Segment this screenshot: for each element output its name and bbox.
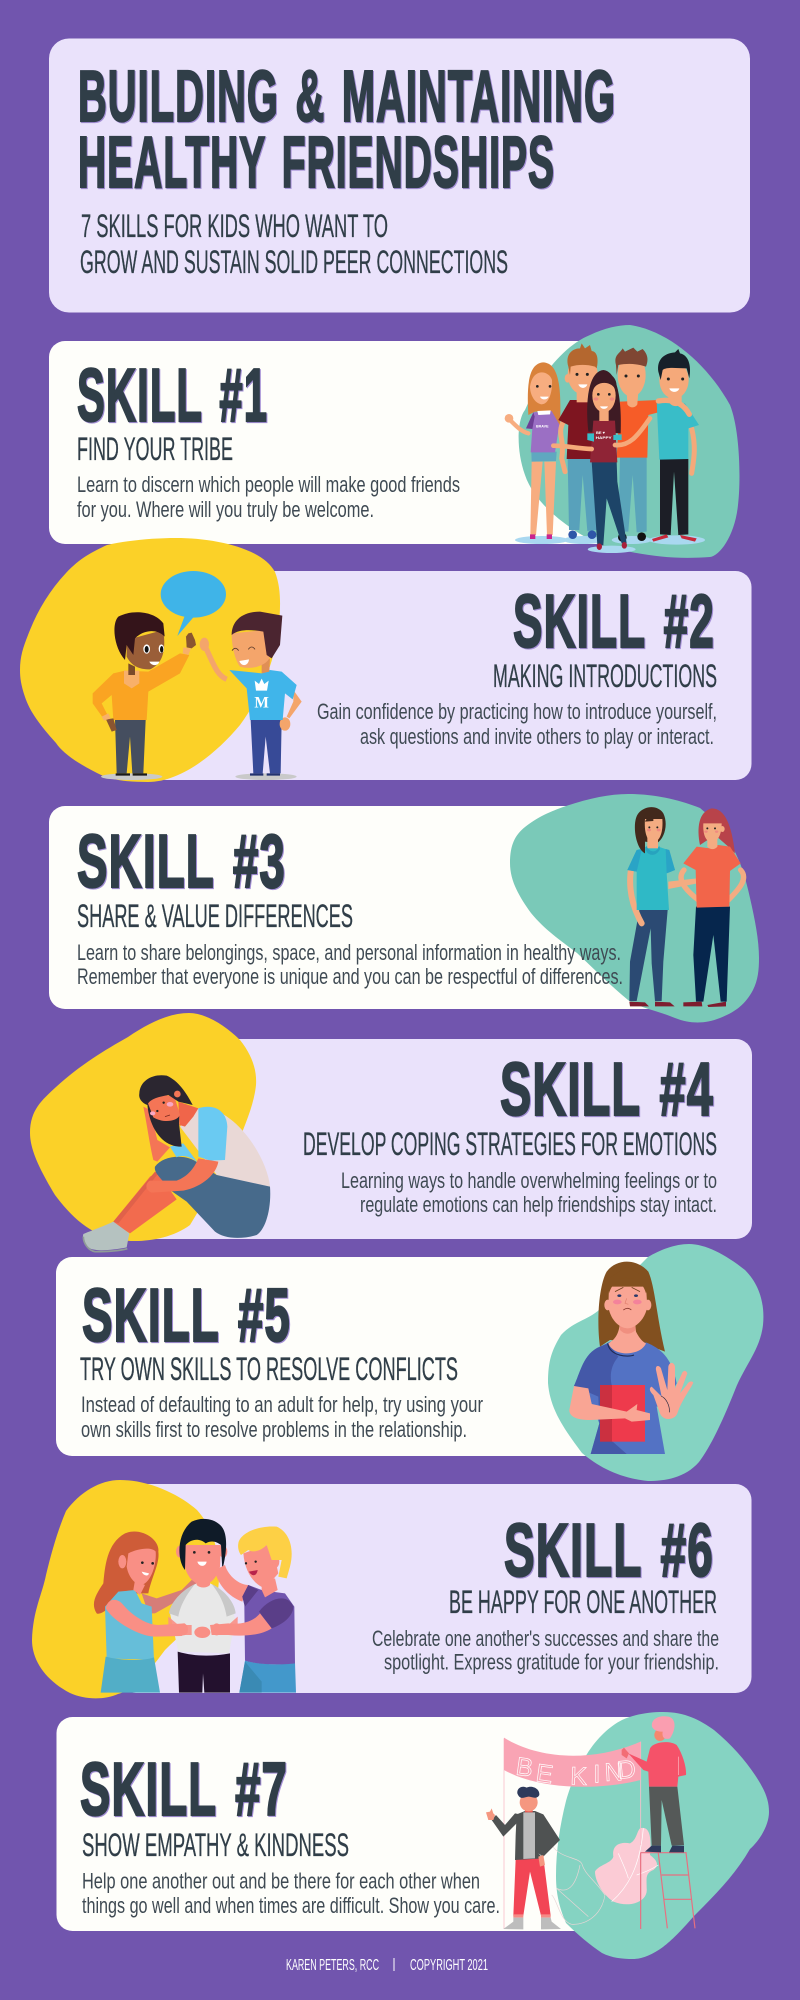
heading: SKILL #5	[82, 1273, 291, 1357]
panel: skill 6	[32, 1480, 752, 1698]
blob: teal	[519, 325, 739, 558]
panel: skill 7	[56, 1712, 769, 1959]
figure: boy in orange sweater	[93, 612, 196, 776]
description	[81, 1392, 483, 1442]
speech bubble	[161, 571, 226, 636]
figure: boy in orange shirt	[615, 348, 661, 542]
subheading: TRY OWN SKILLS TO RESOLVE CONFLICTS	[80, 1351, 458, 1387]
description	[341, 1168, 717, 1217]
subheading: SHARE & VALUE DIFFERENCES	[77, 898, 353, 934]
subtitle: 7 SKILLS FOR KIDS WHO WANT TO	[81, 208, 388, 244]
panel: skill 2	[20, 538, 752, 782]
footer credits: KAREN PETERS, RCC	[286, 1957, 379, 1974]
icon: fists	[179, 1623, 221, 1638]
blob: teal	[548, 1244, 763, 1481]
blob: yellow	[20, 538, 280, 782]
figure: girl in coral shirt	[681, 808, 744, 1007]
figure: girl in teal shirt	[627, 807, 697, 1006]
description: for you. Where will you truly be welcome.	[77, 497, 374, 522]
subtitle	[80, 208, 508, 280]
blob: yellow	[30, 1013, 256, 1241]
figure: boy in blue crown shirt	[200, 612, 302, 776]
illustration: two kids high-fiving	[93, 571, 302, 780]
subheading: SHOW EMPATHY & KINDNESS	[82, 1827, 349, 1863]
banner: BE KIND	[514, 1753, 637, 1791]
illustration: two girls talking	[627, 807, 744, 1007]
heading: SKILL #3	[77, 819, 286, 903]
description: own skills first to resolve problems in the relationship.	[81, 1417, 467, 1442]
figure: boy in teal shirt	[652, 349, 699, 542]
description	[77, 940, 623, 989]
panel: skill 3	[49, 794, 759, 1022]
description: things go well and when times are difficult. Show you care.	[82, 1893, 500, 1918]
icon: red book	[600, 1385, 645, 1442]
panel: skill 4	[30, 1013, 752, 1252]
footer credits: COPYRIGHT 2021	[410, 1957, 488, 1974]
blob: teal	[556, 1712, 769, 1959]
illustration: group of five friends	[505, 343, 705, 553]
description	[372, 1626, 719, 1674]
icon: decorative bush	[552, 1828, 658, 1924]
illustration: three friends fist bump	[94, 1519, 296, 1693]
illustration: sad girl hugging knees	[83, 1075, 270, 1252]
figure: girl with purple shirt	[505, 362, 560, 539]
description: Instead of defaulting to an adult for help, try using your	[81, 1392, 483, 1417]
figure: girl in centre: HAPPY	[596, 436, 612, 440]
title	[78, 57, 616, 203]
heading: SKILL #7	[80, 1747, 288, 1831]
description	[82, 1868, 500, 1918]
description: Help one another out and be there for each other when	[82, 1868, 480, 1894]
girl's front arm	[106, 1600, 188, 1637]
description: Remember that everyone is unique and you can be respectful of differences.	[77, 964, 623, 989]
description	[317, 699, 717, 749]
figure: person on ladder	[622, 1716, 695, 1929]
figure: blond kid in purple	[210, 1526, 296, 1693]
subheading: FIND YOUR TRIBE	[77, 431, 233, 467]
description	[77, 472, 460, 522]
figure: boy in maroon shirt	[558, 343, 598, 539]
figure: boy with thumbs up	[486, 1787, 561, 1929]
description: Learn to share belongings, space, and personal information in healthy ways.	[77, 940, 621, 965]
figure: girl in centre: BE ♥	[596, 430, 606, 435]
panel: skill 5	[56, 1244, 763, 1481]
description: Learn to discern which people will make good friends	[77, 472, 460, 497]
figure: boy in white shirt	[168, 1519, 238, 1693]
illustration: be kind banner scene	[486, 1716, 695, 1929]
heading: SKILL #1	[77, 353, 268, 437]
figure: boy in blue crown shirt: M	[254, 695, 269, 712]
figure: girl in centre	[553, 370, 650, 550]
panel: title header	[49, 38, 750, 312]
figure: girl with purple shirt: BRAVE	[536, 424, 549, 428]
panel: skill 1	[49, 325, 739, 558]
banner	[504, 1738, 641, 1929]
blob: teal	[510, 794, 759, 1022]
illustration: girl with book gesturing stop	[569, 1262, 693, 1454]
figure: girl in blue	[94, 1532, 198, 1693]
blob: yellow	[32, 1480, 219, 1698]
